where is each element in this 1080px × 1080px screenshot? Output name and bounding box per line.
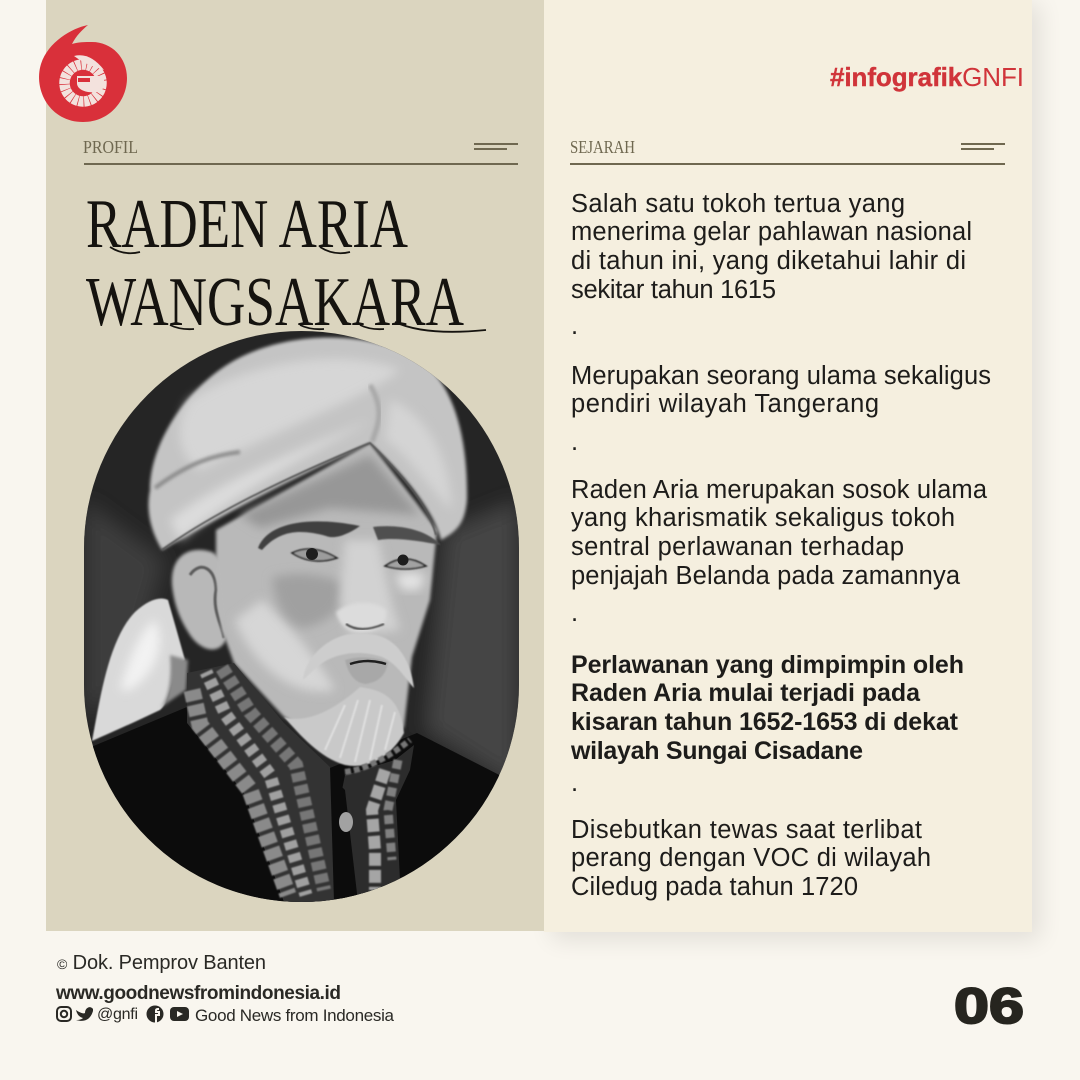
text block: point 3 <box>571 476 988 627</box>
text block: point 2: . <box>571 428 578 456</box>
robe <box>84 707 519 902</box>
text block: point 3: sentral perlawanan terhadap <box>571 533 904 561</box>
text block: point 1: di tahun ini, yang diketahui lahir di <box>571 247 966 275</box>
icon: instagram <box>57 1007 71 1021</box>
credit: © Dok. Pemprov Banten <box>57 952 266 974</box>
text block: point 2: Merupakan seorang ulama sekaligus <box>571 362 991 390</box>
text block: point 2 <box>571 362 991 456</box>
eyebrows <box>258 521 360 550</box>
text block: point 1: menerima gelar pahlawan nasional <box>571 218 972 246</box>
text block: point 5: Disebutkan tewas saat terlibat <box>571 816 922 844</box>
text block: point 3: yang kharismatik sekaligus tokoh <box>571 504 955 532</box>
title: WANGSAKARA <box>86 264 464 341</box>
text block: point 3: . <box>571 599 578 627</box>
text block: point 1: . <box>571 312 578 340</box>
title <box>86 186 486 341</box>
website: www.goodnewsfromindonesia.id <box>55 983 341 1004</box>
text block: point 4 bold: kisaran tahun 1652-1653 di dekat <box>571 708 959 736</box>
text block: point 4 bold: . <box>571 769 578 797</box>
face <box>216 443 437 760</box>
turban <box>148 338 467 550</box>
logo mark: red six <box>39 25 127 122</box>
hashtag: #infografikGNFI <box>830 62 1024 92</box>
logo mark: white garuda ring <box>64 55 104 102</box>
page number: 06 <box>954 978 1024 1034</box>
logo <box>39 25 127 122</box>
text block: point 1: sekitar tahun 1615 <box>571 276 776 304</box>
section label: profil: PROFIL <box>83 137 138 157</box>
text block: point 5 <box>571 816 931 901</box>
text block: point 4 bold: wilayah Sungai Cisadane <box>570 737 863 765</box>
nose <box>336 603 386 632</box>
ear <box>172 550 229 649</box>
panel: profil <box>46 0 544 931</box>
portrait <box>84 331 519 902</box>
icon: twitter <box>76 1007 93 1021</box>
head cloth <box>92 598 185 741</box>
section rule: profil <box>84 143 518 165</box>
text block: point 2: pendiri wilayah Tangerang <box>571 390 879 418</box>
text block: point 4 bold: Raden Aria mulai terjadi pada <box>571 679 921 707</box>
text block: point 1 <box>571 190 972 340</box>
title: RADEN ARIA <box>86 186 408 263</box>
section rule: sejarah <box>570 143 1005 165</box>
text block: point 3: penjajah Belanda pada zamannya <box>571 562 961 590</box>
text block: point 5: perang dengan VOC di wilayah <box>571 844 931 872</box>
section label: sejarah: SEJARAH <box>570 137 635 157</box>
brand name: Good News from Indonesia <box>195 1006 395 1025</box>
footer <box>55 952 1024 1034</box>
text block: point 3: Raden Aria merupakan sosok ulama <box>571 476 988 504</box>
text block: point 5: Ciledug pada tahun 1720 <box>571 873 858 901</box>
portrait backdrop <box>84 331 519 902</box>
text block: point 1: Salah satu tokoh tertua yang <box>571 190 905 218</box>
icon: youtube <box>170 1007 189 1021</box>
beard and moustache <box>284 634 414 766</box>
text block: point 4 bold <box>570 651 964 797</box>
eyes <box>292 549 337 561</box>
collar embroidery <box>187 663 414 902</box>
icon: facebook <box>146 1006 164 1023</box>
handle: @gnfi <box>97 1006 138 1023</box>
text block: point 4 bold: Perlawanan yang dimpimpin oleh <box>571 651 964 679</box>
panel: sejarah <box>544 0 1040 940</box>
